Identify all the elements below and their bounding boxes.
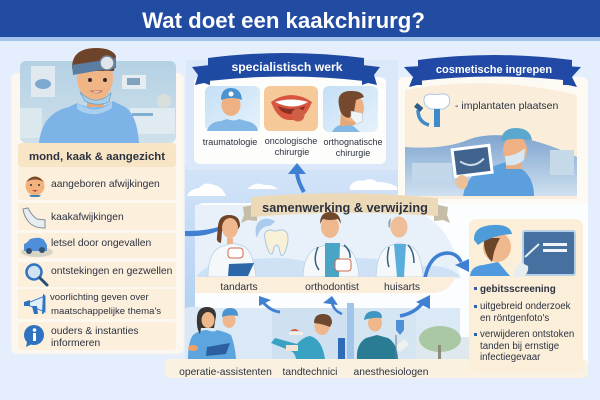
item: ouders en instanties informeren <box>18 322 176 350</box>
panel: central sky backdrop <box>185 60 400 360</box>
tile: traumatologie: traumatologie <box>203 137 257 147</box>
heading: mond, kaak & aangezicht: mond, kaak & aangezicht <box>29 151 165 163</box>
panel: specialistisch werk <box>192 53 386 164</box>
item: kaakafwijkingen <box>18 203 176 230</box>
heading: mond, kaak & aangezicht <box>18 143 176 167</box>
panel: mond, kaak en aangezicht <box>11 48 184 354</box>
tile: oncologische chirurgie <box>264 86 318 157</box>
illustration: boom <box>416 326 469 359</box>
ribbon: cosmetische ingrepen <box>404 55 581 87</box>
ribbon: samenwerking en verwijzing: samenwerking & verwijzing <box>262 201 428 215</box>
item: voorlichting geven: voorlichting geven over <box>50 292 149 303</box>
panel: gebitsscreening <box>469 219 583 372</box>
title: Wat doet een kaakchirurg? <box>142 8 425 33</box>
item: aangeboren afwijkingen <box>18 167 176 200</box>
text: gebitsscreening bullet list: uitgebreid onderzoek <box>480 301 571 312</box>
item: ouders en instanties informeren: ouders & instanties <box>51 326 139 337</box>
item: voorlichting geven <box>18 289 176 319</box>
labels: tandarts, orthodontist, huisarts: orthodontist <box>305 282 359 293</box>
arrow: samenwerking to specialistisch werk <box>288 163 306 192</box>
person: tandarts <box>208 215 256 277</box>
tile: traumatologie <box>203 86 260 147</box>
panel: ondersteunend team <box>165 295 588 378</box>
labels: operatie-assistenten, tandtechnici, anesthesiologen: operatie-assistenten <box>179 367 272 378</box>
title banner <box>0 0 600 41</box>
illustration: arts met rontgenfoto <box>405 128 577 196</box>
arrow: verwijzing vanuit links <box>185 227 218 236</box>
person: huisarts <box>376 216 423 277</box>
text: implantaten plaatsen: - implantaten plaatsen <box>455 100 558 112</box>
tile: orthognatische chirurgie <box>323 86 383 158</box>
item: kaakafwijkingen: kaakafwijkingen <box>51 212 124 223</box>
item: letsel door ongevallen: letsel door ongevallen <box>51 238 151 249</box>
tile: orthognatische chirurgie: orthognatische <box>323 137 383 147</box>
text: gebitsscreening bullet list <box>474 284 574 363</box>
item: ontstekingen en gezwellen <box>18 262 176 287</box>
labels: tandarts, orthodontist, huisarts: tandarts <box>220 282 258 293</box>
icon: kies <box>256 219 288 256</box>
tile: oncologische chirurgie: oncologische <box>265 136 317 146</box>
illustration: surgeon in clinic <box>20 48 176 143</box>
arrow: team naar orthodontist <box>323 296 342 314</box>
arrow: team naar huisarts <box>400 295 430 316</box>
arrow: huisarts naar gebitsscreening <box>425 253 469 278</box>
ribbon: specialistisch werk <box>192 53 380 85</box>
text: gebitsscreening bullet list: tanden bij ernstige <box>480 341 559 352</box>
text: gebitsscreening bullet list: verwijderen ontstoken <box>480 329 574 340</box>
ribbon: specialistisch werk: specialistisch werk <box>231 60 343 74</box>
text: gebitsscreening bullet list: gebitsscreening <box>480 284 556 295</box>
tile: oncologische chirurgie: chirurgie <box>275 147 309 157</box>
text: gebitsscreening bullet list: infectiegevaar <box>480 352 541 363</box>
labels: operatie-assistenten, tandtechnici, anesthesiologen: tandtechnici <box>283 367 337 378</box>
item: voorlichting geven: maatschappelijke thema's <box>51 306 161 317</box>
panel: samenwerking en verwijzing <box>185 193 588 373</box>
labels: operatie-assistenten, tandtechnici, anesthesiologen: anesthesiologen <box>354 367 429 378</box>
text: gebitsscreening bullet list: en röntgenfoto's <box>480 313 549 324</box>
person: tandtechnicus <box>271 314 345 359</box>
item: ontstekingen en gezwellen: ontstekingen en gezwellen <box>51 266 173 277</box>
ribbon: cosmetische ingrepen: cosmetische ingrepen <box>436 64 552 76</box>
labels: operatie-assistenten, tandtechnici, anesthesiologen <box>165 359 588 378</box>
person: orthodontist <box>303 212 359 277</box>
labels: tandarts, orthodontist, huisarts <box>195 277 455 293</box>
illustration: arts met gebitsfoto <box>470 225 575 277</box>
labels: tandarts, orthodontist, huisarts: huisarts <box>384 282 420 293</box>
arrow: team naar tandarts <box>259 296 280 312</box>
icon: tandimplantaat <box>414 94 450 127</box>
person: anesthesioloog <box>357 311 409 359</box>
item: letsel door ongevallen <box>18 233 176 258</box>
item: ouders en instanties informeren: informeren <box>51 338 100 349</box>
tile: orthognatische chirurgie: chirurgie <box>336 148 370 158</box>
panel: cosmetische ingrepen <box>398 55 588 207</box>
ribbon: samenwerking en verwijzing <box>241 193 450 223</box>
person: operatie-assistenten <box>188 307 238 359</box>
item: aangeboren afwijkingen: aangeboren afwijkingen <box>51 179 160 190</box>
